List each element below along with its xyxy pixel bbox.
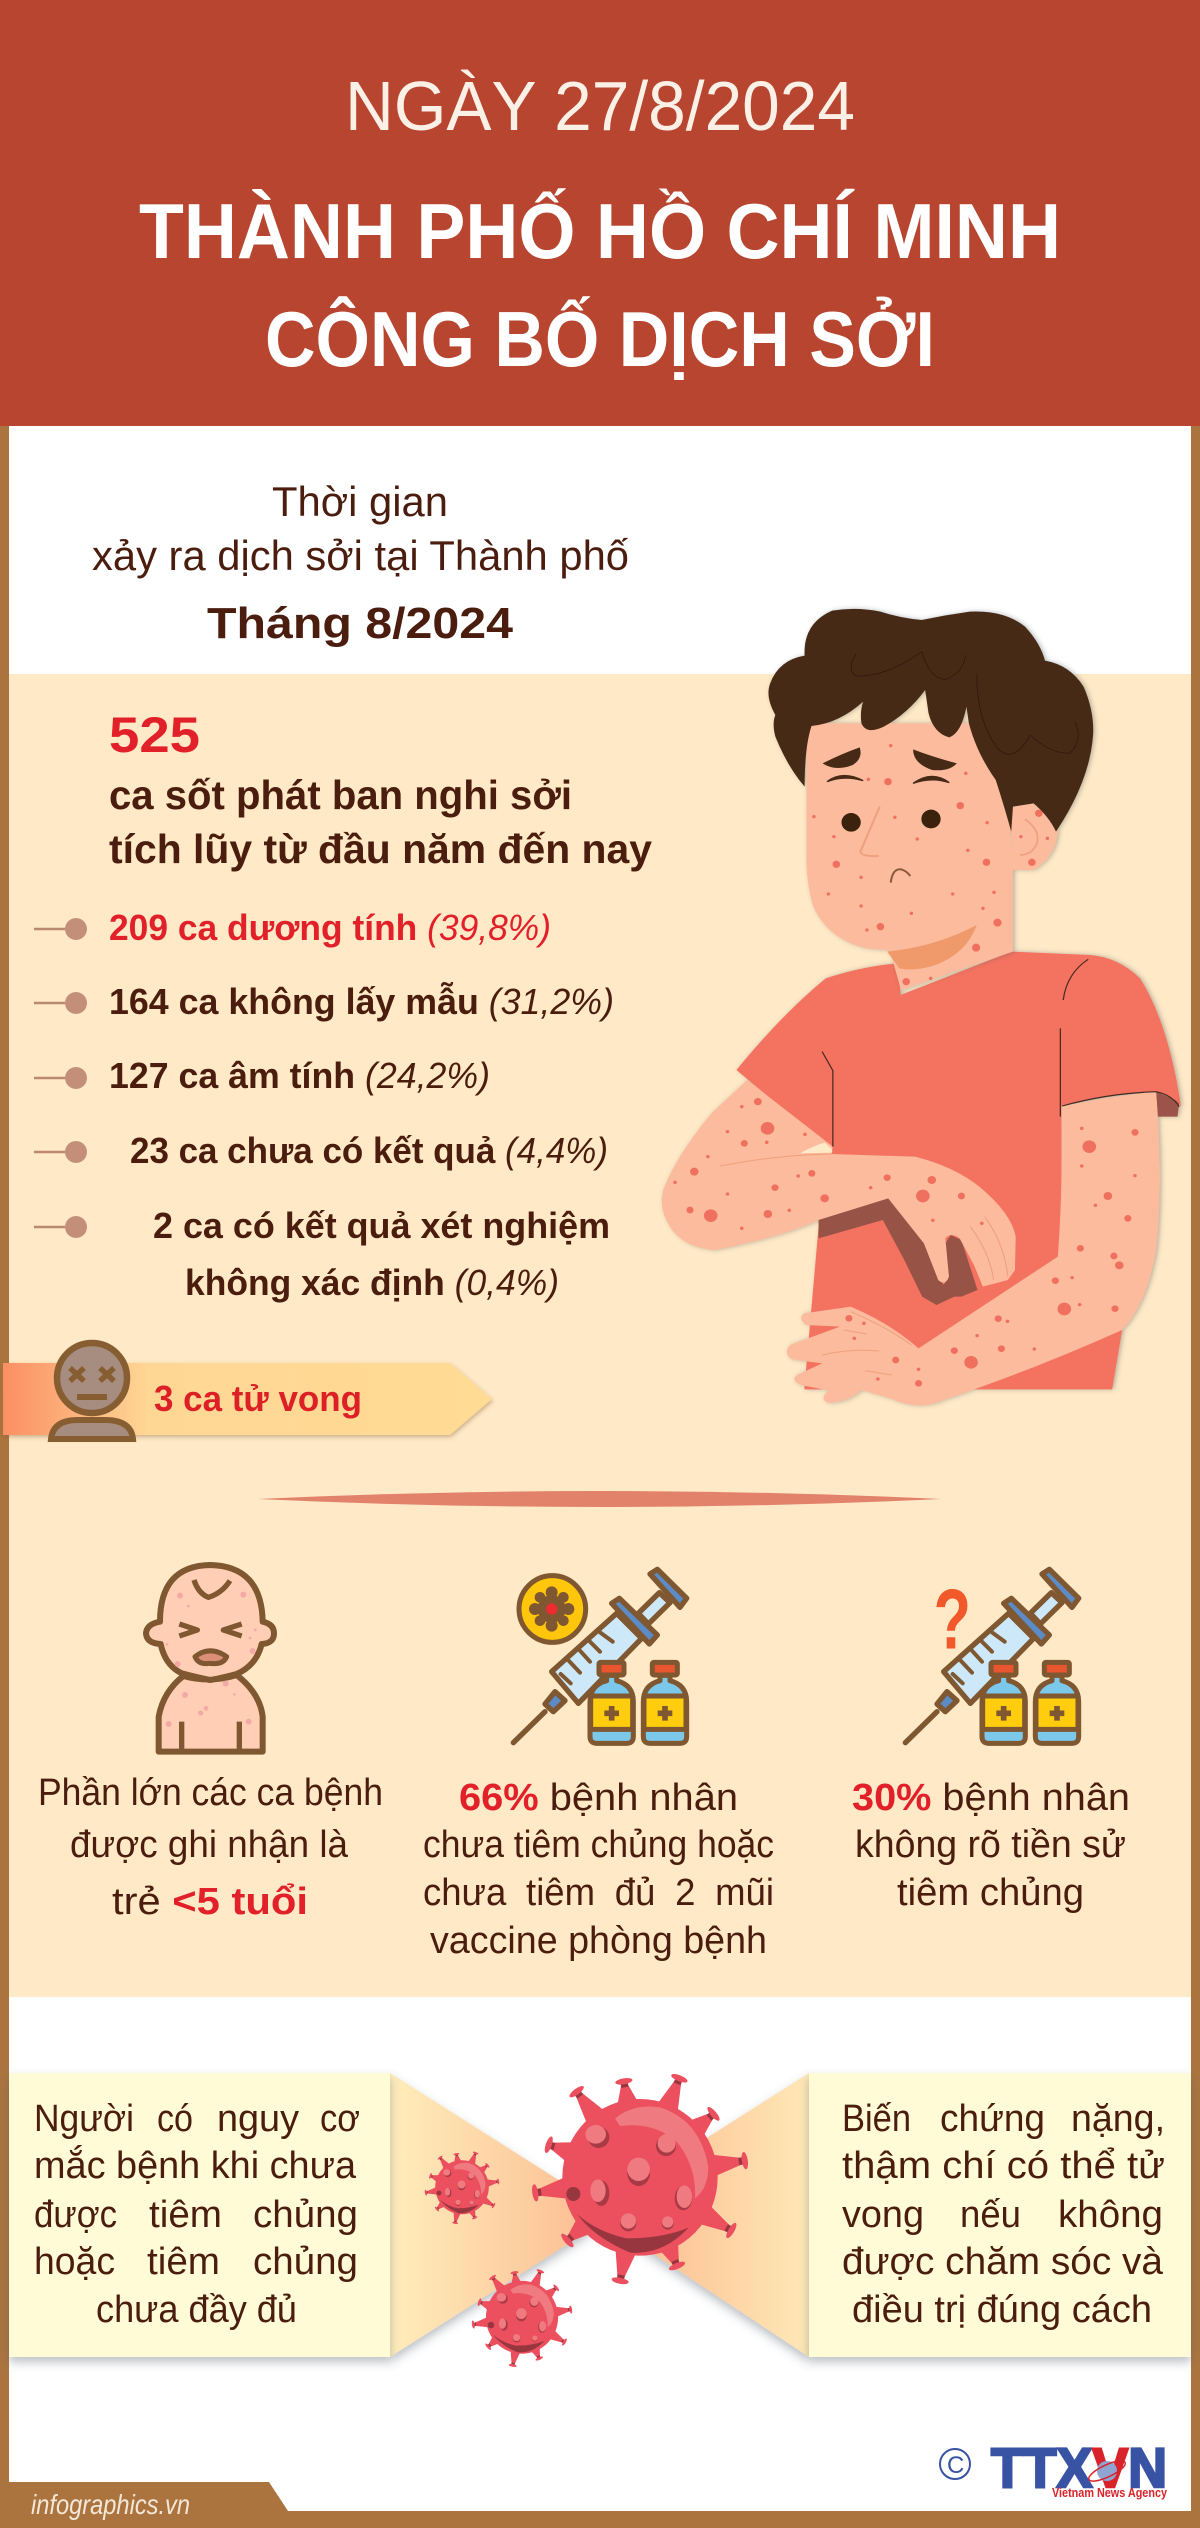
title line 2: CÔNG BỐ DỊCH SỞI [265, 295, 935, 383]
complications text: nếu [960, 2194, 1021, 2236]
text: unvaccinated 66 percent: 66% bệnh nhân [459, 1777, 738, 1819]
illustration: large virus [530, 2071, 750, 2286]
text: children under five [38, 1772, 383, 1923]
complications text: Biến [842, 2098, 911, 2140]
text: children under five: trẻ <5 tuổi [112, 1881, 308, 1923]
total number: 525 [109, 707, 200, 763]
logo letters: TTXVN [991, 2436, 1167, 2499]
page frame left border [0, 420, 9, 2528]
logo: TTXVN [940, 2436, 1168, 2500]
title line 1: THÀNH PHỐ HỒ CHÍ MINH [139, 187, 1061, 275]
text: unvaccinated 66 percent [423, 1777, 774, 1962]
banner arrow shape [3, 1363, 492, 1435]
risk group text: nguy [217, 2098, 299, 2140]
copyright symbol: C [947, 2452, 964, 2479]
risk group text: Người [34, 2098, 134, 2140]
complications text: điều trị đúng cách [852, 2289, 1152, 2331]
logo globe [1086, 2457, 1128, 2485]
man body with shirt and arms [662, 952, 1181, 1405]
logo caption: Vietnam News Agency [1052, 2485, 1168, 2500]
risk group text: tiêm [149, 2194, 222, 2236]
icon: question mark with syringe and vials: ? [934, 1573, 971, 1668]
text: unknown vaccination history 30 percent: không rõ tiền sử [855, 1824, 1126, 1866]
text: unknown vaccination history 30 percent: 30% bệnh nhân [852, 1777, 1130, 1819]
box: left [9, 2073, 390, 2357]
text: unvaccinated 66 percent: vaccine phòng bệnh [430, 1920, 767, 1962]
page frame bottom border [0, 2511, 1200, 2528]
death count: 3 ca tử vong [154, 1378, 362, 1419]
panel: cream statistics background [8, 674, 1192, 1997]
man head with hair, face and neck [768, 609, 1093, 990]
header band [0, 0, 1200, 426]
text: unvaccinated 66 percent: chưa tiêm đủ 2 mũi [423, 1872, 774, 1914]
suspected cases summary [109, 707, 652, 872]
complications text: được chăm sóc và [842, 2241, 1164, 2283]
panel: complications [640, 2073, 1191, 2357]
outbreak time block [92, 478, 629, 648]
list item: undetermined: 2 ca có kết quả xét nghiệm [153, 1205, 610, 1246]
illustration: small virus lower [471, 2268, 573, 2368]
text: unvaccinated 66 percent: chưa tiêm chủng hoặc [423, 1824, 774, 1866]
risk group text: tiêm [147, 2241, 220, 2283]
complications text: chứng [940, 2098, 1045, 2140]
text: unknown vaccination history 30 percent: tiêm chủng [897, 1872, 1084, 1914]
list item: pending: 23 ca chưa có kết quả (4,4%) [130, 1130, 608, 1171]
case breakdown list [34, 907, 614, 1303]
page frame right border [1191, 420, 1200, 2528]
summary line 1: ca sốt phát ban nghi sởi [109, 772, 572, 818]
panel: risk group [9, 2073, 590, 2357]
time label line 2: xảy ra dịch sởi tại Thành phố [92, 532, 629, 579]
risk group text [34, 2098, 360, 2331]
summary line 2: tích lũy từ đầu năm đến nay [109, 826, 652, 872]
list item: undetermined [34, 1205, 610, 1303]
footer source tab: infographics.vn [31, 2489, 190, 2520]
time value: Tháng 8/2024 [207, 599, 514, 648]
text: children under five: được ghi nhận là [70, 1824, 349, 1866]
illustration: man with measles rash [662, 609, 1181, 1405]
footer source tab [0, 2482, 288, 2528]
list item: positive: 209 ca dương tính (39,8%) [109, 907, 551, 948]
risk group text: có [157, 2098, 193, 2140]
risk group text: chủng [253, 2194, 358, 2236]
time label line 1: Thời gian [272, 478, 448, 525]
risk group text: hoặc [34, 2241, 115, 2283]
risk group text: chưa đầy đủ [96, 2289, 297, 2331]
cone: right [640, 2073, 809, 2357]
complications text [842, 2098, 1165, 2331]
date heading: NGÀY 27/8/2024 [345, 67, 855, 145]
risk group text: được [34, 2194, 117, 2236]
risk group text: cơ [320, 2098, 360, 2140]
cone: left [390, 2073, 590, 2357]
section divider [258, 1491, 941, 1507]
box: right [809, 2073, 1191, 2357]
text: unknown vaccination history 30 percent [852, 1777, 1130, 1914]
icon: question mark with syringe and vials [905, 1569, 1079, 1743]
illustration: small virus upper [424, 2151, 500, 2225]
risk group text: chủng [253, 2241, 358, 2283]
death callout banner [3, 1343, 492, 1439]
complications text: thậm chí có thể tử [842, 2145, 1165, 2187]
list item: negative: 127 ca âm tính (24,2%) [109, 1055, 490, 1096]
text: children under five: Phần lớn các ca bệnh [38, 1772, 383, 1814]
list item: undetermined: không xác định (0,4%) [185, 1262, 559, 1303]
complications text: vong [842, 2194, 924, 2236]
complications text: nặng, [1071, 2098, 1165, 2140]
complications text: không [1058, 2194, 1163, 2236]
copyright symbol [940, 2449, 970, 2479]
list item: not sampled: 164 ca không lấy mẫu (31,2%) [109, 981, 614, 1022]
icon: deceased person [51, 1343, 133, 1439]
risk group text: mắc bệnh khi chưa [34, 2144, 357, 2187]
icon: crying baby [146, 1565, 274, 1752]
icon: virus coin with syringe and vials [513, 1569, 687, 1743]
